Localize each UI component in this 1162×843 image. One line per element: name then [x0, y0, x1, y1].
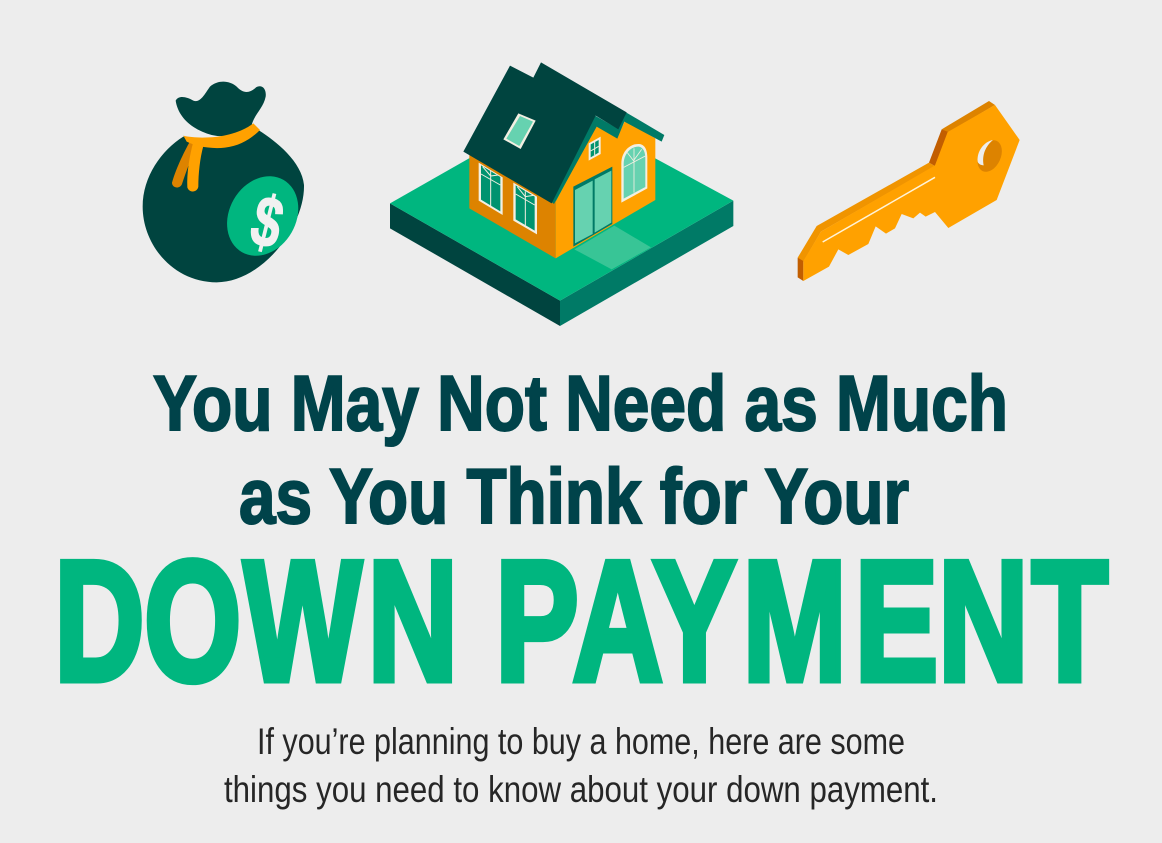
- title: line one: You May Not Need as Much: [153, 359, 1008, 447]
- icon: house on green lot: [390, 62, 733, 326]
- key top edge of head: [942, 101, 995, 133]
- front wall: [556, 121, 655, 258]
- title: line two: as You Think for Your: [239, 452, 909, 540]
- small gable window: [589, 137, 601, 161]
- key notch edge: [929, 129, 948, 166]
- key tip edge: [798, 258, 803, 281]
- icon: key: [798, 101, 1020, 281]
- arched window: [621, 144, 647, 203]
- left windows: [479, 163, 537, 234]
- key top edge of blade: [798, 163, 935, 262]
- key hole: [973, 136, 1007, 176]
- lot: [390, 203, 560, 326]
- subtitle: line two: things you need to know about your down payment.: [224, 769, 938, 810]
- walkway: [574, 226, 651, 269]
- roof eave: [550, 112, 664, 204]
- key face: [803, 105, 1020, 281]
- icon: money bag: [143, 82, 312, 282]
- key highlight: [823, 177, 935, 242]
- dollar sign: $: [243, 180, 291, 265]
- roof: [463, 62, 627, 203]
- left wall: [469, 150, 556, 258]
- door: [573, 167, 612, 247]
- title: down payment: DOWN PAYMENT: [54, 525, 1108, 717]
- skylight: [503, 113, 536, 149]
- subtitle: line one: If you’re planning to buy a home, here are some: [257, 721, 905, 762]
